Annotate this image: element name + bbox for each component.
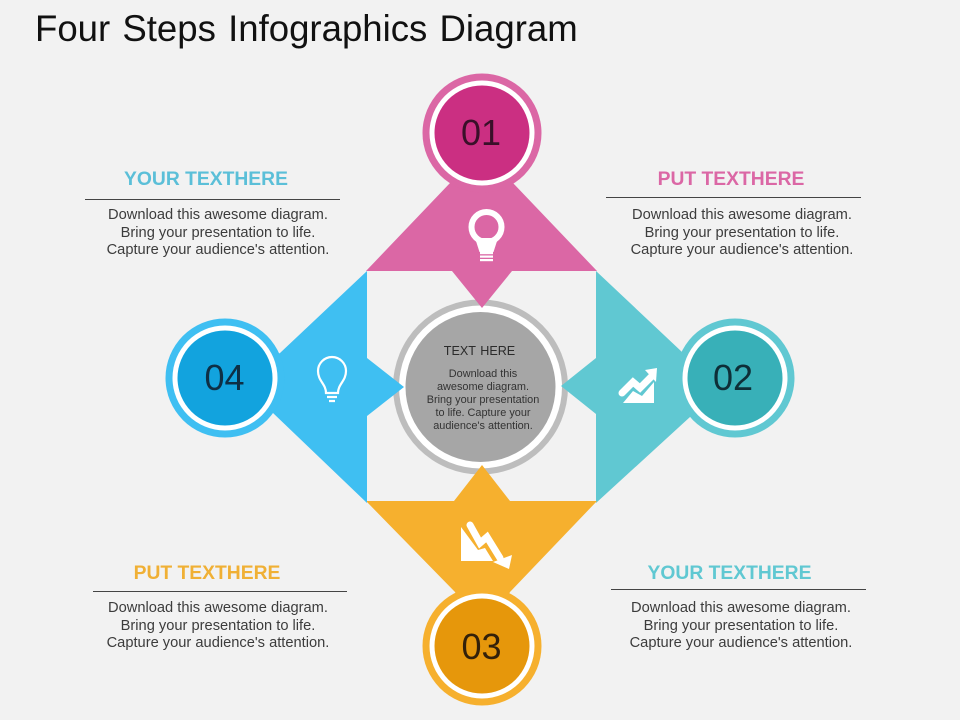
text block: bottom right: Capture your audience's attention. [630,635,852,651]
text block: top right: PUT TEXTHERE [658,169,805,190]
badge: 04 [166,318,284,438]
badge: 03: 03 [461,626,502,667]
badge: 03 [422,586,542,706]
badge: 01: 01 [461,112,501,153]
text block: top right: Bring your presentation to life. [645,225,839,241]
badge: 04: 04 [204,357,245,398]
text block: bottom right [611,563,866,651]
text block: bottom right: Bring your presentation to life. [644,618,838,634]
panel: step 03 yellow arrow [366,465,597,646]
panel: step 01 pink arrow [366,133,597,308]
text block: top left [85,169,340,258]
panel: centre circle: Bring your presentation [427,394,539,406]
panel: centre circle: audience's attention. [433,420,533,432]
text block: top right: Capture your audience's attention. [631,242,853,258]
panel: centre circle: awesome diagram. [437,381,529,393]
icon: falling chart [461,525,512,569]
panel: step 04 blue arrow [225,271,404,503]
text block: bottom left: Download this awesome diagram. [108,600,328,616]
text block: top left: Download this awesome diagram. [108,207,328,223]
panel: centre circle: Download this [449,368,518,380]
text block: top right: Download this awesome diagram. [632,207,852,223]
icon: rising chart [622,368,657,403]
panel: centre circle: to life. Capture your [435,407,531,419]
text block: top left: YOUR TEXTHERE [124,169,288,190]
panel: centre circle: TEXT HERE [444,344,515,358]
text block: top left: Bring your presentation to life. [121,225,315,241]
text block: bottom left: Bring your presentation to life. [121,618,315,634]
text block: bottom right: YOUR TEXTHERE [648,563,812,584]
icon: outline light bulb [318,357,346,401]
text block: bottom left: Capture your audience's attention. [107,635,329,651]
text block: top left: Capture your audience's attention. [107,242,329,258]
panel: centre circle [393,300,568,474]
text block: bottom left: PUT TEXTHERE [134,563,281,584]
badge: 01 [422,74,542,192]
text block: bottom left [93,563,347,651]
title: Four Steps Infographics Diagram [35,8,578,49]
text block: top right [606,169,861,258]
badge: 02 [676,318,794,438]
panel: step 02 teal arrow [561,271,735,503]
badge: 02: 02 [713,357,753,398]
text block: bottom right: Download this awesome diagram. [631,600,851,616]
icon: pink light bulb [472,212,502,261]
